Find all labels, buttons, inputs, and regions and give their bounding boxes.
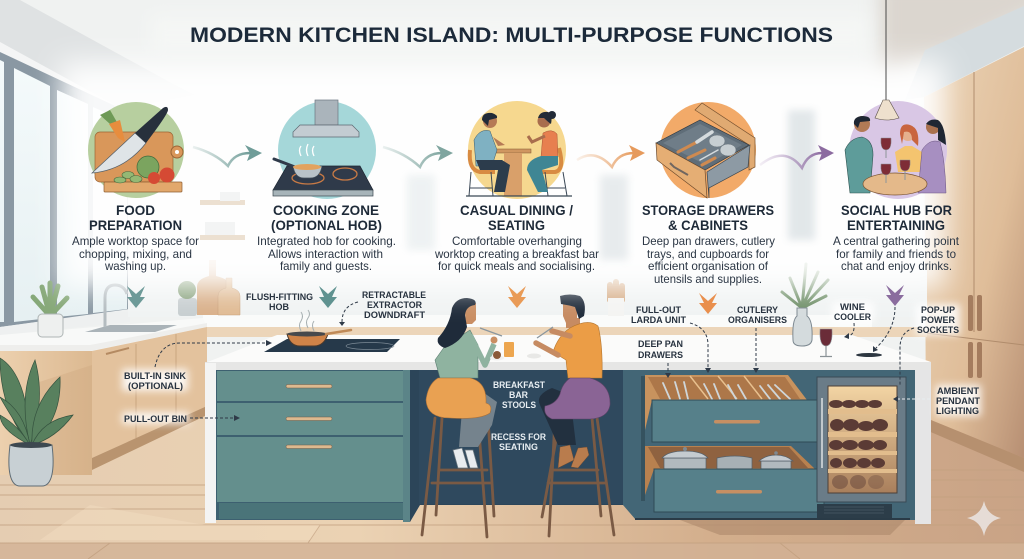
panel text: social hub: for family and friends to [836, 247, 956, 261]
label glows [122, 302, 981, 424]
label: recess for seating: RECESS FOR [491, 432, 546, 443]
chevron: casual dining [508, 286, 526, 308]
left base cabinets [0, 327, 207, 475]
wine glass and power sockets [820, 329, 882, 357]
icon: storage drawer [656, 102, 756, 198]
shirt [553, 322, 602, 378]
seat [426, 378, 491, 418]
panel text: social hub [833, 202, 960, 273]
pan [287, 310, 351, 346]
arrow: storage to social [760, 145, 834, 168]
panel text: cooking zone: family and guests. [280, 259, 372, 273]
left island cabinet [216, 370, 410, 522]
chevron: cooking zone [319, 286, 337, 308]
label: wine cooler: COOLER [834, 312, 871, 323]
label: flush-fitting hob: FLUSH-FITTING [246, 292, 313, 303]
bottom drawer with pans [645, 446, 824, 512]
face [464, 303, 476, 324]
icon: casual dining [466, 101, 572, 199]
panel text: food preparation: Ample worktop space for [72, 234, 199, 248]
fork, plate and juice [480, 328, 502, 336]
faded shelves and panels [200, 192, 245, 240]
seating recess [410, 370, 623, 522]
label: retractable extractor downdraft: EXTRACTOR [367, 300, 422, 311]
label: ambient pendant lighting: AMBIENT [937, 386, 979, 397]
wine glasses [881, 138, 910, 175]
top drawer with cutlery [645, 375, 820, 442]
panel text: storage drawers [642, 202, 775, 286]
label: retractable extractor downdraft: DOWNDRAFT [364, 310, 425, 321]
man [845, 137, 873, 193]
label: full-out larda unit: LARDA UNIT [631, 315, 686, 326]
icon: social hub [845, 0, 947, 199]
counter plant [33, 283, 67, 337]
wine cooler [817, 377, 906, 518]
panel text: social hub: A central gathering point [833, 234, 960, 248]
label: full-out larda unit [631, 305, 686, 326]
label: breakfast bar stools: BAR [509, 390, 528, 401]
shoes [453, 448, 478, 468]
floor [0, 400, 1024, 559]
seat [545, 378, 610, 419]
arrow: ambient lighting callout [893, 396, 930, 402]
panel text: storage drawers: trays, and cupboards for [647, 247, 769, 261]
torso [435, 330, 478, 378]
hob on the worktop [264, 310, 400, 352]
trousers [539, 388, 576, 445]
neck [566, 318, 580, 328]
arrow: larda callout [690, 323, 711, 373]
jeans [459, 388, 497, 447]
label: wine cooler: WINE [840, 302, 865, 313]
woman on orange stool [422, 298, 514, 537]
faucet [105, 285, 127, 327]
label: pull-out bin: PULL-OUT BIN [124, 414, 187, 425]
label: pop-up power sockets: POWER [921, 315, 955, 326]
label: ambient pendant lighting [936, 386, 980, 417]
white haze behind text [60, 62, 945, 288]
blurred panels behind text [407, 110, 815, 260]
chevron: social [886, 285, 904, 306]
panel text: social hub: chat and enjoy drinks. [841, 259, 952, 273]
icon: cooking zone [273, 100, 376, 199]
label: recess for seating [491, 432, 546, 453]
plate [527, 354, 541, 358]
label: cutlery organisers [728, 305, 787, 326]
shoes [558, 445, 589, 468]
arms [536, 331, 570, 355]
label: pop-up power sockets: POP-UP [921, 305, 956, 316]
label: retractable extractor downdraft: RETRACTABLE [362, 290, 426, 301]
panel text: casual dining: for quick meals and socialising. [438, 259, 595, 273]
label: wine cooler [834, 302, 871, 323]
left counter with sink [0, 285, 207, 475]
panel text: social hub: SOCIAL HUB FOR [841, 202, 952, 218]
label: ambient pendant lighting: LIGHTING [936, 406, 979, 417]
table [863, 173, 927, 195]
panel text: storage drawers: & CABINETS [668, 217, 748, 233]
right island cabinet [623, 370, 915, 520]
arrow: deep pan callout [665, 363, 671, 378]
arrow: cooking to dining [383, 145, 453, 167]
hair [438, 298, 476, 348]
utensils [678, 132, 718, 165]
label: retractable extractor downdraft [362, 290, 426, 321]
label: built-in sink [124, 371, 186, 392]
arrow: dining to storage [577, 145, 645, 167]
panel text: food preparation: chopping, mixing, and [79, 247, 192, 261]
icon: food preparation [88, 102, 184, 198]
label: deep pan drawers [638, 339, 683, 361]
label: cutlery organisers: CUTLERY [737, 305, 779, 316]
label: full-out larda unit: FULL-OUT [636, 305, 681, 316]
haze around title [150, 15, 870, 55]
arrow: pull-out bin callout [190, 415, 240, 421]
right wall cabinets [924, 47, 1024, 472]
arrow: social chevron callout [873, 307, 895, 352]
title: MODERN KITCHEN ISLAND: MULTI-PURPOSE FUNCTIONS [190, 24, 833, 47]
label: deep pan drawers: DRAWERS [638, 350, 683, 361]
label: ambient pendant lighting: PENDANT [936, 396, 980, 407]
panel text: storage drawers: Deep pan drawers, cutlery [642, 234, 775, 248]
utensil jar [608, 282, 624, 316]
panel text: casual dining: Comfortable overhanging [452, 234, 582, 248]
panel text: food preparation: FOOD [116, 202, 155, 218]
panel text: storage drawers: STORAGE DRAWERS [642, 202, 774, 218]
back counter and backsplash [128, 270, 927, 337]
label: breakfast bar stools: BREAKFAST [493, 380, 545, 391]
panel text: casual dining: SEATING [488, 217, 545, 233]
panel text: casual dining [434, 202, 599, 273]
label: cutlery organisers: ORGANISERS [728, 315, 787, 326]
label: pop-up power sockets [917, 305, 959, 336]
panel text: cooking zone: Allows interaction with [268, 247, 383, 261]
arrow: extractor callout [339, 302, 358, 326]
chevron: food preparation [127, 286, 145, 308]
right woman [918, 141, 946, 193]
panel text: casual dining: CASUAL DINING / [460, 202, 573, 218]
floor plant [0, 358, 73, 486]
label: pop-up power sockets: SOCKETS [917, 325, 959, 336]
arrow: food to cooking [193, 145, 262, 166]
label: flush-fitting hob: HOB [269, 302, 289, 313]
stool legs [542, 418, 614, 536]
window [0, 52, 130, 335]
panel text: food preparation: washing up. [104, 259, 166, 273]
panel text: storage drawers: utensils and supplies. [654, 272, 762, 286]
panel text: casual dining: worktop creating a breakfast bar [434, 247, 599, 261]
panel text: cooking zone [257, 202, 396, 273]
panel text: cooking zone: Integrated hob for cooking. [257, 234, 396, 248]
label: built-in sink: (OPTIONAL) [128, 381, 183, 392]
label: deep pan drawers: DEEP PAN [638, 339, 683, 350]
head [563, 302, 577, 323]
label: breakfast bar stools [493, 380, 545, 411]
panel text: cooking zone: (OPTIONAL HOB) [271, 217, 382, 233]
watermark star [967, 501, 1001, 536]
label: built-in sink: BUILT-IN SINK [124, 371, 186, 382]
middle woman [895, 146, 922, 172]
diner man [469, 113, 510, 196]
kitchen island worktop [205, 335, 931, 524]
label: recess for seating: SEATING [499, 442, 538, 453]
chevron: storage [699, 293, 717, 314]
panel text: cooking zone: COOKING ZONE [273, 202, 379, 218]
panel text: social hub: ENTERTAINING [847, 217, 945, 233]
cutting boards and small plant [178, 260, 240, 316]
panel text: food preparation [72, 202, 199, 273]
label: flush-fitting hob [246, 292, 313, 313]
panel text: food preparation: PREPARATION [89, 217, 182, 233]
panel text: storage drawers: efficient organisation of [648, 259, 769, 273]
diner woman [527, 111, 567, 196]
arrow: wine cooler callout [844, 323, 854, 339]
arrow: sockets callout [900, 328, 914, 386]
arrow: built-in sink callout [155, 340, 272, 367]
vase plant [782, 264, 828, 346]
man on purple stool [527, 294, 614, 536]
stool legs [422, 418, 494, 537]
arrow: cutlery callout [753, 328, 759, 373]
ceiling and upper wall [0, 0, 1024, 118]
label: breakfast bar stools: STOOLS [502, 400, 536, 411]
